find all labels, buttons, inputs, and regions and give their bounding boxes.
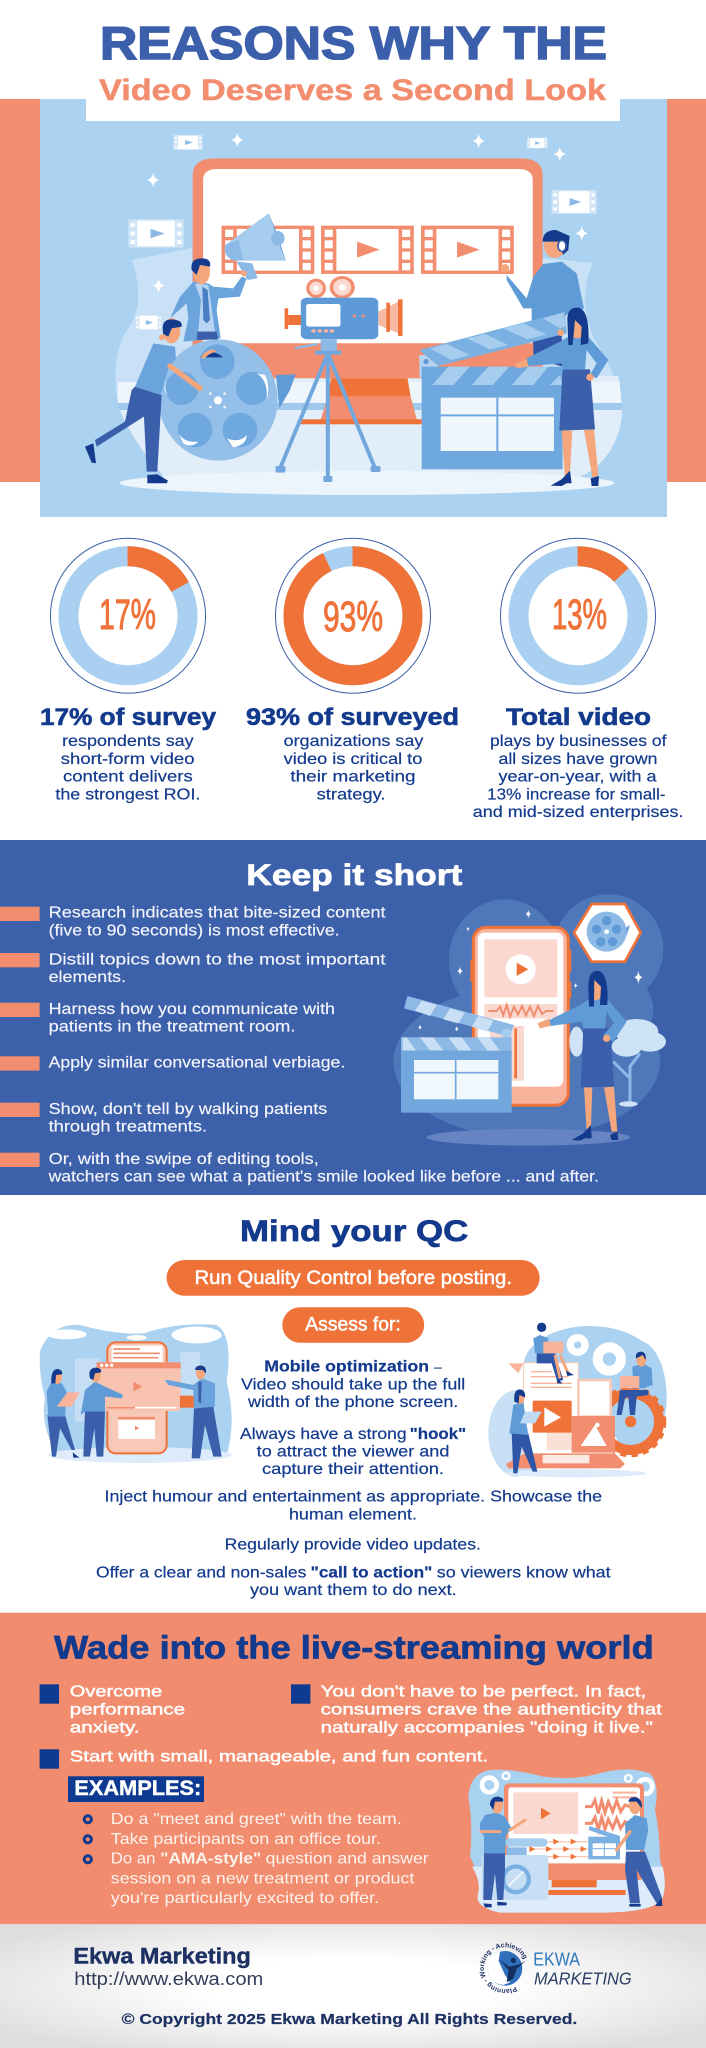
stat description: respondents say [62, 733, 194, 750]
header: page title [0, 17, 706, 482]
panel: keep it short [0, 840, 706, 1195]
value: 17% [99, 591, 156, 639]
stat description: video is critical to [284, 751, 423, 768]
footer [0, 1924, 706, 2048]
value: 93% [323, 593, 383, 641]
example list: question and answer [266, 1850, 429, 1867]
point: performance anxiety [70, 1684, 185, 1736]
point: performance anxiety: performance [70, 1702, 185, 1719]
heading: Keep it short [246, 859, 462, 892]
logo: Ekwa Marketing [480, 1942, 632, 1994]
point: authenticity: You don't have to be perfect. In fact, [321, 1684, 646, 1701]
hero backdrop shapes [115, 248, 622, 495]
bullet text: Distill topics down to the most important [49, 951, 386, 968]
salmon side band right [667, 99, 706, 482]
qc text: call to action: you want them to do next. [250, 1582, 457, 1599]
stat description: their marketing [290, 769, 416, 786]
logo: Ekwa Marketing: EKWA [533, 1949, 581, 1970]
bullet text: Apply similar conversational verbiage. [49, 1055, 345, 1072]
qc text: mobile optimization [241, 1359, 465, 1411]
logo: Ekwa Marketing: MARKETING [534, 1968, 632, 1988]
heading: Wade into the live-streaming world [54, 1629, 654, 1665]
qc text: mobile optimization: – [434, 1359, 442, 1375]
stat description: all sizes have grown [498, 751, 658, 768]
icon: movie camera on tripod [276, 276, 403, 482]
examples label: EXAMPLES: [74, 1777, 201, 1800]
square markers [40, 1684, 310, 1769]
icon: megaphone [225, 213, 286, 280]
point: authenticity [321, 1684, 663, 1736]
hero left figures [85, 258, 296, 483]
qc text: call to action: Offer a clear and non-sales [96, 1564, 306, 1581]
donut chart 93% [276, 538, 430, 693]
stat: 93% [246, 538, 459, 803]
pill: run quality control [167, 1260, 540, 1296]
qc text: call to action: "call to action" [311, 1564, 432, 1581]
monitor [193, 158, 543, 424]
qc text: humour: human element. [289, 1506, 417, 1523]
value: 13% [552, 591, 607, 639]
illustration: team building video content [488, 1323, 667, 1477]
panel: live-streaming [0, 1613, 706, 1924]
person: man with headset (head) [543, 230, 570, 258]
point: start small: Start with small, manageable, and fun content. [70, 1749, 488, 1766]
title line: REASONS WHY THE: REASONS WHY THE [100, 17, 607, 69]
qc text: humour: Inject humour and entertainment as appropriate. Showcase the [104, 1489, 602, 1506]
stat: 13% [473, 538, 684, 821]
illustration: team reviewing mobile video [40, 1324, 232, 1463]
stat heading: Total video [506, 704, 651, 731]
point: authenticity: consumers crave the authenticity that [321, 1702, 663, 1719]
stat description: the strongest ROI. [55, 786, 200, 803]
stat description: strategy. [317, 786, 386, 803]
icon: sparkles [147, 133, 588, 293]
stat description: 13% increase for small- [487, 786, 666, 803]
qc text: hook [240, 1426, 466, 1478]
logo: Ekwa Marketing: Planning - Working - Achieving [480, 1942, 527, 1994]
point: performance anxiety: anxiety. [70, 1719, 140, 1736]
illustration: two men editing video [468, 1770, 665, 1913]
stat description: short-form video [61, 751, 195, 768]
bullet markers [0, 907, 40, 1167]
person: man in suit with megaphone [170, 258, 247, 342]
example list: session on a new treatment or product [111, 1870, 415, 1887]
example list [111, 1811, 429, 1907]
example bullets [84, 1816, 91, 1863]
qc text: call to action: so viewers know what [437, 1564, 611, 1581]
stat heading: 93% of surveyed [246, 704, 459, 731]
qc text: mobile optimization: width of the phone screen. [247, 1394, 458, 1411]
bullet text: patients in the treatment room. [49, 1019, 295, 1036]
stat description [473, 733, 684, 821]
stat heading: 17% of survey [40, 704, 217, 731]
stat description: and mid-sized enterprises. [473, 804, 684, 821]
bullet text [47, 905, 599, 1186]
film strips [222, 226, 514, 274]
point: performance anxiety: Overcome [70, 1684, 162, 1701]
bullet text: Research indicates that bite-sized content [49, 905, 386, 922]
panel: mind your QC [40, 1215, 667, 1599]
bullet text: through treatments. [49, 1119, 207, 1136]
illustration: phone, clapperboard and woman [393, 894, 666, 1146]
copyright: © Copyright 2025 Ekwa Marketing All Rights Reserved. [122, 2011, 577, 2028]
company name: Ekwa Marketing [73, 1943, 251, 1968]
qc text: hook: "hook" [410, 1426, 466, 1443]
bullet text: Harness how you communicate with [49, 1001, 335, 1018]
panel: hero illustration [40, 99, 667, 517]
bullet text: watchers can see what a patient's smile looked like before ... and after. [47, 1169, 599, 1186]
bullet text: elements. [49, 969, 126, 986]
qc text: video updates: Regularly provide video updates. [225, 1537, 481, 1554]
icon: clapperboard [419, 312, 567, 469]
qc text: hook: capture their attention. [262, 1461, 444, 1478]
example list: you're particularly excited to offer. [111, 1890, 379, 1907]
icon: film reel [159, 339, 296, 461]
qc text: hook: Always have a strong [240, 1426, 407, 1443]
subtitle text: Video Deserves a Second Look [99, 74, 606, 107]
qc text: hook: to attract the viewer and [257, 1444, 449, 1461]
stat: 17% [40, 538, 217, 803]
qc text: humour [104, 1489, 602, 1523]
example list: Do an [111, 1850, 155, 1867]
point: authenticity: naturally accompanies "doing it live." [321, 1719, 653, 1736]
icon: small video frames [128, 135, 597, 330]
heading: Mind your QC [240, 1215, 468, 1248]
pill: run quality control: Run Quality Control before posting. [194, 1268, 512, 1289]
example list: Do a "meet and greet" with the team. [111, 1811, 402, 1828]
stat description [284, 733, 423, 803]
donut chart 17% [50, 538, 206, 693]
qc text: mobile optimization: Video should take up the full [241, 1376, 465, 1393]
pill: assess for: Assess for: [305, 1315, 401, 1336]
donut chart 13% [500, 538, 656, 693]
stat description: plays by businesses of [490, 733, 667, 750]
example list: Take participants on an office tour. [111, 1831, 381, 1848]
bullet text: Show, don't tell by walking patients [49, 1101, 327, 1118]
salmon side band left [0, 99, 40, 482]
person: man pushing reel [85, 318, 200, 483]
example list: "AMA-style" [160, 1850, 261, 1867]
subtitle banner [86, 60, 620, 121]
bullet text: Or, with the swipe of editing tools, [49, 1151, 319, 1168]
pill: assess for [282, 1307, 424, 1343]
bullet text: (five to 90 seconds) is most effective. [49, 923, 340, 940]
person: man with headset (body) [501, 262, 584, 367]
hero upper artwork [128, 133, 597, 482]
qc text: call to action [96, 1564, 611, 1599]
stat description: organizations say [284, 733, 423, 750]
stat description: content delivers [63, 769, 193, 786]
website: http://www.ekwa.com [74, 1968, 263, 1989]
qc text: mobile optimization: Mobile optimization [264, 1359, 429, 1376]
hero right figures [419, 262, 608, 486]
person: woman with clapperboard [514, 308, 608, 486]
stat description: year-on-year, with a [498, 769, 657, 786]
stat description [55, 733, 200, 803]
